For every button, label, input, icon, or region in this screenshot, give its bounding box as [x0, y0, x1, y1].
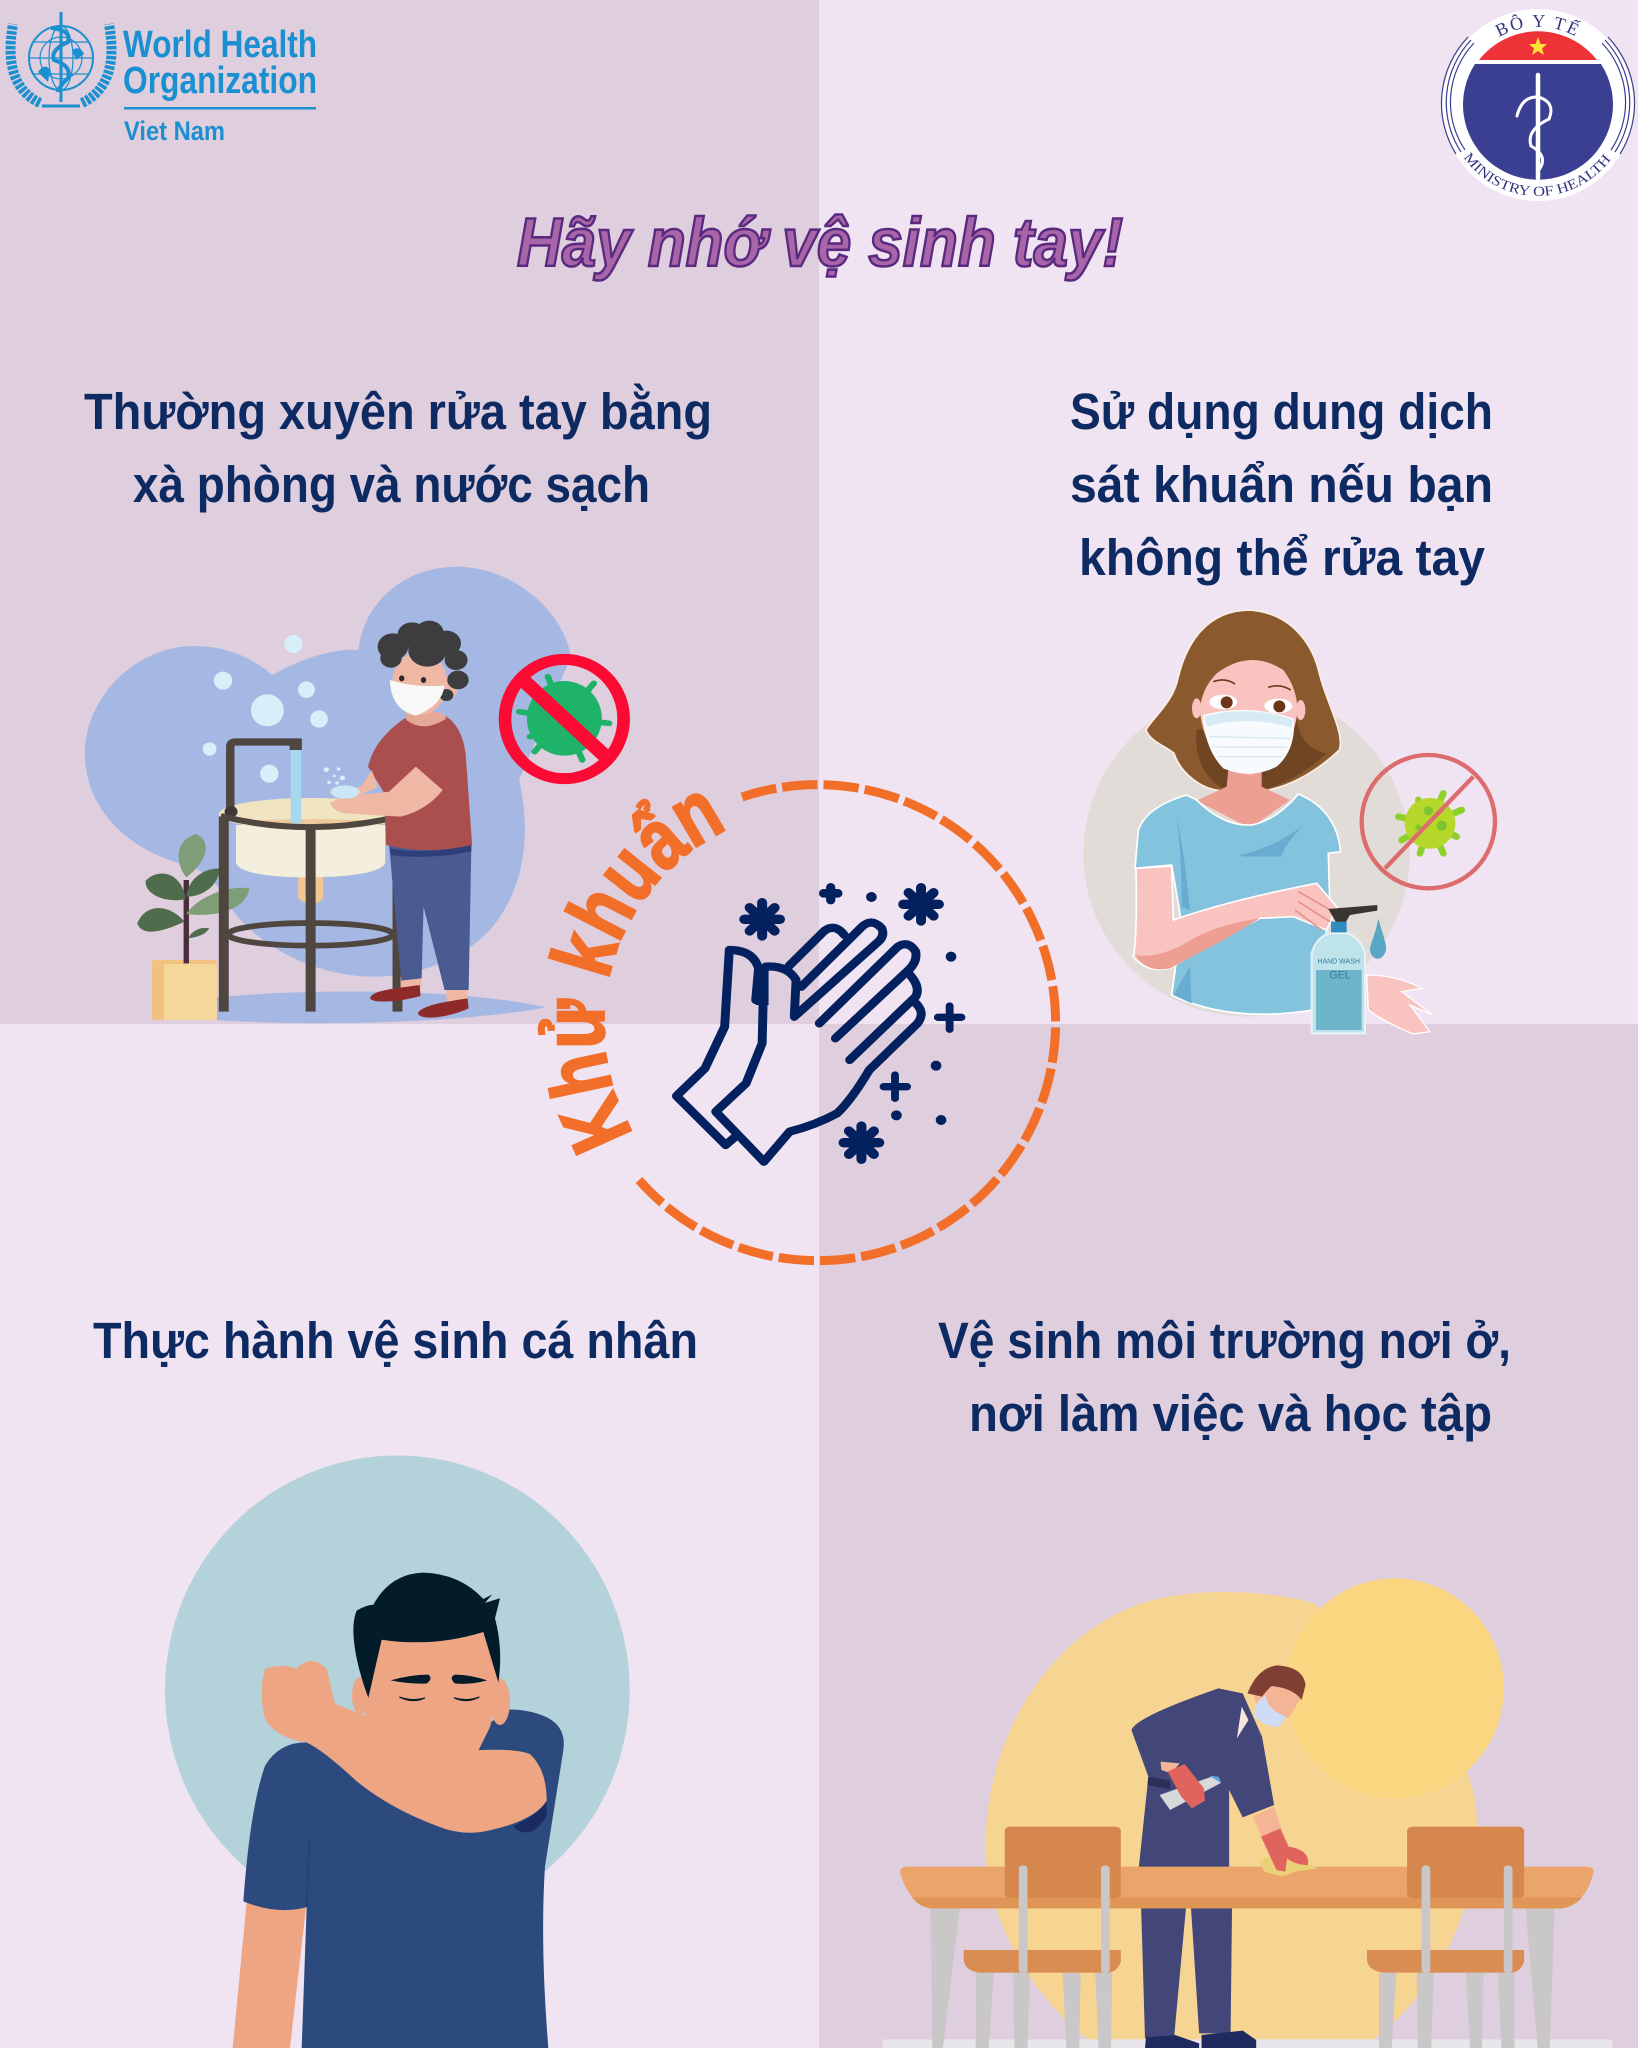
decorative side rings — [1441, 37, 1635, 154]
icon: rod and serpent — [1517, 75, 1551, 178]
arm holding pump — [1133, 866, 1337, 969]
illustration: woman with hand sanitizer — [1083, 610, 1495, 1034]
head — [1252, 1670, 1305, 1718]
logo arc text — [1464, 14, 1611, 196]
sanitizer bottle: GEL — [1329, 969, 1351, 981]
icon: no germs red sign — [505, 659, 624, 779]
hair — [1146, 610, 1340, 791]
floor shadow — [217, 991, 546, 1023]
eyes — [1209, 695, 1237, 709]
yellow blob — [985, 1592, 1477, 2039]
drop — [1370, 918, 1386, 959]
mask — [1203, 710, 1294, 774]
logo arc text: BÔ Y TẾ — [1494, 14, 1581, 37]
heading: wash hands — [84, 382, 712, 513]
brows and eyes — [391, 1675, 487, 1701]
plant — [137, 834, 249, 1020]
title: Hãy nhớ vệ sinh tay! — [517, 204, 1123, 281]
dashed circle — [639, 785, 1056, 1261]
icon: WHO emblem — [11, 12, 111, 106]
WHO wordmark: Organization — [123, 60, 317, 102]
basin — [236, 825, 385, 877]
icon: clean hands — [676, 887, 961, 1162]
illustration: man coughing into elbow — [165, 1456, 630, 2048]
heading: personal hygiene: Thực hành vệ sinh cá nhân — [93, 1312, 698, 1369]
central badge: disinfect — [538, 780, 1060, 1266]
tap — [230, 742, 301, 810]
table top — [900, 1867, 1594, 1908]
icon: star — [1529, 37, 1547, 55]
left arm — [233, 1901, 307, 2048]
cleaning rag and glove — [1260, 1828, 1318, 1877]
WHO wordmark — [123, 24, 317, 146]
heading: clean environment: nơi làm việc và học tập — [969, 1385, 1492, 1442]
WHO wordmark: Viet Nam — [124, 116, 225, 146]
ears — [352, 1677, 368, 1715]
heading: clean environment: Vệ sinh môi trường nơi ở, — [938, 1312, 1511, 1369]
sparkles — [751, 892, 956, 1153]
WHO wordmark: World Health — [123, 24, 317, 66]
heading: wash hands: Thường xuyên rửa tay bằng — [84, 382, 712, 440]
left chair — [964, 1827, 1121, 1973]
yellow circle — [1286, 1578, 1504, 1798]
illustration: cleaner wiping table — [882, 1578, 1613, 2048]
soap bubbles — [203, 635, 345, 785]
boy — [330, 621, 472, 1018]
logo: World Health Organization Viet Nam — [11, 12, 317, 146]
neck — [1197, 770, 1290, 828]
shirt — [243, 1709, 564, 2048]
sink stand — [221, 816, 401, 1012]
floor — [882, 2039, 1613, 2048]
right chair — [1367, 1827, 1524, 1973]
sanitizer bottle: HAND WASH — [1317, 958, 1360, 965]
open hand — [1367, 975, 1433, 1034]
heading: hand sanitizer: không thể rửa tay — [1079, 529, 1486, 586]
heading: hand sanitizer: Sử dụng dung dịch — [1070, 383, 1493, 440]
face — [362, 1630, 500, 1754]
hair — [353, 1573, 500, 1698]
blue blob — [85, 567, 571, 977]
logo: Ministry of Health — [1440, 9, 1636, 201]
heading: hand sanitizer — [1070, 383, 1493, 586]
background circle — [1083, 690, 1410, 1017]
face — [1200, 660, 1297, 775]
arm and bottle — [1160, 1762, 1180, 1773]
table legs — [931, 1908, 1555, 2048]
heading: hand sanitizer: sát khuẩn nếu bạn — [1070, 456, 1493, 513]
chair legs — [976, 1973, 1514, 2048]
heading: wash hands: xà phòng và nước sạch — [133, 456, 650, 513]
heading: clean environment — [938, 1312, 1511, 1442]
icon: no germs pink sign — [1362, 755, 1495, 888]
raised arm — [262, 1661, 547, 1833]
logo arc text: MINISTRY OF HEALTH — [1464, 152, 1611, 196]
sanitizer bottle — [1312, 905, 1377, 1033]
armpit shadow — [513, 1803, 547, 1832]
curved text: Khử khuẩn: Khử khuẩn — [538, 793, 726, 1156]
illustration: boy washing hands — [85, 567, 624, 1023]
shirt — [1135, 794, 1341, 1014]
drain pipe — [298, 873, 323, 904]
background circle — [165, 1456, 630, 1925]
cleaner — [1131, 1665, 1306, 2048]
